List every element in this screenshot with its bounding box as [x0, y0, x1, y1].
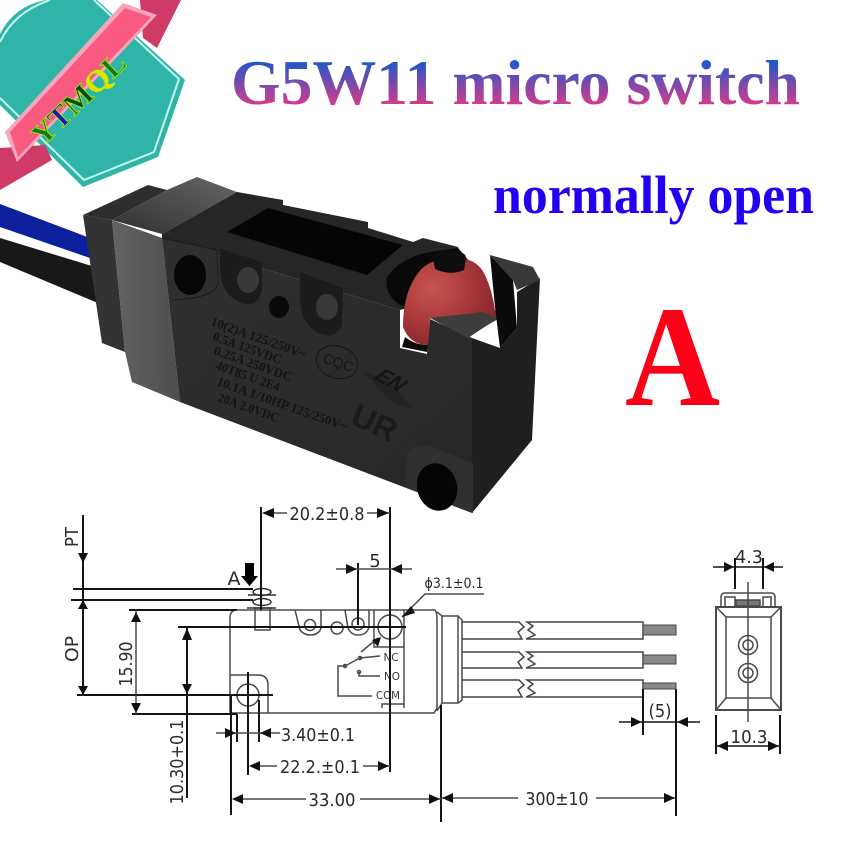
subtitle: normally open: normally open	[493, 165, 814, 225]
embossed rating text: 0.5A 125VDC	[211, 329, 284, 367]
end view labels: 10.3	[730, 727, 768, 748]
dimension labels	[62, 504, 672, 811]
dimension labels: (5)	[648, 701, 672, 722]
title: G5W11 micro switch	[231, 47, 800, 118]
logo: YTMQL badge	[0, 0, 185, 190]
embossed rating text: 10(2)A 125/250V~	[209, 314, 308, 361]
actuation direction arrow A	[241, 563, 258, 586]
mounting slots and holes	[162, 238, 218, 300]
photo: switch wires	[0, 204, 105, 306]
dimension labels: 5	[369, 551, 381, 572]
red actuator dome	[403, 258, 500, 345]
dimension labels: PT	[62, 526, 83, 547]
certification marks	[312, 340, 414, 449]
dimension labels: 10.30+0.1	[167, 720, 188, 804]
end view labels: 4.3	[735, 547, 763, 568]
black actuator tip	[433, 251, 466, 273]
dimension labels: 22.2.±0.1	[280, 757, 360, 778]
certification marks: EN	[368, 365, 414, 395]
dimension lines	[71, 507, 441, 822]
photo: micro switch body	[83, 177, 540, 515]
embossed rating text: 40T85 U 2E4	[214, 358, 283, 394]
dimension labels: 300±10	[526, 789, 588, 810]
terminal labels: NC	[384, 651, 399, 664]
dimension arrows	[78, 508, 675, 804]
switch body outline	[230, 608, 462, 713]
dimension labels: ϕ3.1±0.1	[424, 576, 484, 592]
embossed rating text	[209, 314, 349, 434]
logo text: YTMQL	[25, 46, 133, 152]
dimension labels: A	[228, 568, 240, 590]
terminal labels	[376, 651, 400, 702]
embossed rating text: 0.25A 250VDC	[212, 343, 294, 384]
dimension labels: 33.00	[308, 790, 356, 811]
drawing: lead wires	[462, 622, 676, 697]
dimension drawing: side view	[62, 504, 676, 822]
terminal labels: NO	[384, 670, 400, 683]
end view labels	[730, 547, 768, 748]
dimension labels: 15.90	[116, 642, 137, 686]
certification marks: CQC	[321, 350, 356, 375]
certification marks: UR	[346, 397, 403, 449]
version letter A: A	[625, 278, 720, 437]
embossed rating text: 20A 2.0VDC	[216, 390, 281, 425]
actuator plunger	[247, 588, 276, 608]
dimension drawing: end view	[713, 547, 783, 754]
dimension labels: 20.2±0.8	[290, 504, 364, 525]
wire tips	[643, 625, 676, 689]
dimension: wire strip length	[619, 689, 700, 816]
terminal labels: COM	[376, 689, 400, 702]
dimension labels: OP	[62, 636, 83, 662]
dimension labels: 3.40±0.1	[281, 725, 355, 746]
wiring schematic	[338, 637, 381, 696]
embossed rating text: 10.1A 1/10HP 125/250V~	[215, 374, 349, 434]
